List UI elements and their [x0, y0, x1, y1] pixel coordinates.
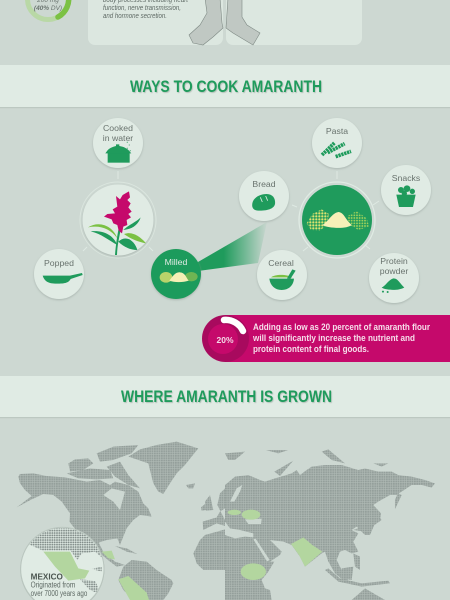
- icon: powder pile: [382, 278, 404, 293]
- label: Milled: [165, 257, 188, 267]
- panel: cooking diagram: [34, 118, 431, 303]
- black sea: [245, 519, 262, 524]
- lens text: over 7000 years ago: [31, 589, 88, 598]
- land: kamchatka: [395, 493, 402, 509]
- map detail: [30, 528, 102, 592]
- label: Popped: [44, 258, 74, 268]
- land: cuba: [115, 546, 137, 554]
- label: Cereal: [268, 258, 294, 268]
- grown region: caucasus: [242, 510, 260, 520]
- beam from milled to milled product: [198, 222, 267, 271]
- cereal: [257, 250, 307, 300]
- milled: [151, 249, 201, 299]
- callout text: [252, 322, 431, 354]
- bread: [239, 171, 289, 221]
- land: iceland: [186, 483, 195, 488]
- panel: nutrition continuation: [28, 0, 362, 45]
- lens text: MEXICO: [31, 573, 63, 582]
- icon: cereal bowl: [269, 269, 296, 290]
- callout text: will significantly increase the nutrient and: [252, 333, 415, 343]
- world map: east: [225, 449, 435, 600]
- hudson bay: [103, 488, 125, 510]
- callout: mexico lens: [20, 527, 107, 600]
- label: Bread: [252, 179, 276, 189]
- heading: WAYS TO COOK AMARANTH: [130, 77, 322, 96]
- label: [103, 123, 133, 143]
- title band: where grown: [0, 376, 450, 418]
- gauge: 20%: [216, 335, 234, 345]
- land: eurasia and africa: [225, 465, 435, 600]
- gauge: [202, 315, 249, 362]
- pasta: [312, 118, 362, 168]
- land: franz josef: [266, 450, 288, 453]
- mediterranean: [225, 522, 253, 538]
- world map: west: [17, 442, 225, 600]
- icon: fusilli: [322, 143, 351, 157]
- title band: ways to cook: [0, 65, 450, 108]
- mexico region: [43, 552, 89, 581]
- land: south america: [118, 560, 173, 600]
- cooked in water: [93, 118, 143, 168]
- snacks: [381, 165, 431, 215]
- protein powder: [369, 253, 419, 303]
- connector ticks: [83, 171, 379, 251]
- lens text: [31, 573, 88, 598]
- icon: frying pan: [43, 273, 83, 284]
- milled product: [299, 182, 375, 258]
- grown region: south asia: [291, 537, 322, 567]
- icon: snack bowl: [396, 185, 416, 207]
- land: western europe: [203, 488, 225, 530]
- label: Snacks: [392, 173, 421, 183]
- label: in water: [103, 133, 133, 143]
- icon: large flour and grains: [307, 209, 369, 231]
- body text: [103, 0, 189, 20]
- label: powder: [380, 266, 408, 276]
- heading: WHERE AMARANTH IS GROWN: [121, 387, 332, 406]
- lens text: Originated from: [31, 581, 75, 590]
- land: svalbard: [225, 452, 245, 460]
- land: north america: [17, 473, 152, 567]
- land: severnaya: [322, 449, 345, 463]
- donut chart: 40% DV: [28, 0, 69, 20]
- text panel: [88, 0, 223, 45]
- callout text: protein content of final goods.: [253, 344, 369, 354]
- donut chart: 40% DV: (40% DV): [34, 5, 62, 12]
- plant circle: [80, 182, 156, 258]
- popped: [34, 249, 84, 299]
- red sea: [253, 539, 270, 561]
- land: west africa: [193, 529, 225, 570]
- grown region: central america: [102, 551, 115, 559]
- icon: flour and grains: [160, 272, 198, 283]
- usa dots: [30, 528, 102, 560]
- label: Cooked: [103, 123, 133, 133]
- body text: and hormone secretion.: [103, 11, 167, 20]
- land: novaya zemlya: [274, 461, 293, 476]
- land: australia: [352, 588, 385, 600]
- callout: 20 percent flour: [202, 315, 450, 362]
- label: Protein: [380, 256, 408, 266]
- icon: bread loaf: [252, 194, 275, 211]
- baltic: [230, 485, 242, 502]
- caribbean dots: [80, 567, 102, 592]
- land: uk and ireland: [201, 495, 213, 511]
- land: japan: [353, 517, 382, 532]
- figure panel: [226, 0, 362, 45]
- icon: amaranth plant: [88, 191, 146, 255]
- land: greenland: [128, 442, 198, 494]
- label: [380, 256, 408, 276]
- icon: legs and feet: [189, 0, 260, 45]
- icon: steaming pot: [105, 142, 131, 163]
- body text: function, nerve transmission,: [103, 3, 181, 12]
- land: philippines and indonesia: [325, 553, 390, 587]
- land: new siberian islands: [373, 463, 388, 467]
- grown region: east africa: [241, 563, 266, 580]
- grown region: andes: [118, 576, 149, 600]
- label: Pasta: [326, 126, 348, 136]
- land: arctic islands: [67, 445, 140, 488]
- grown region: europe: [228, 510, 241, 515]
- callout text: Adding as low as 20 percent of amaranth flour: [253, 322, 431, 332]
